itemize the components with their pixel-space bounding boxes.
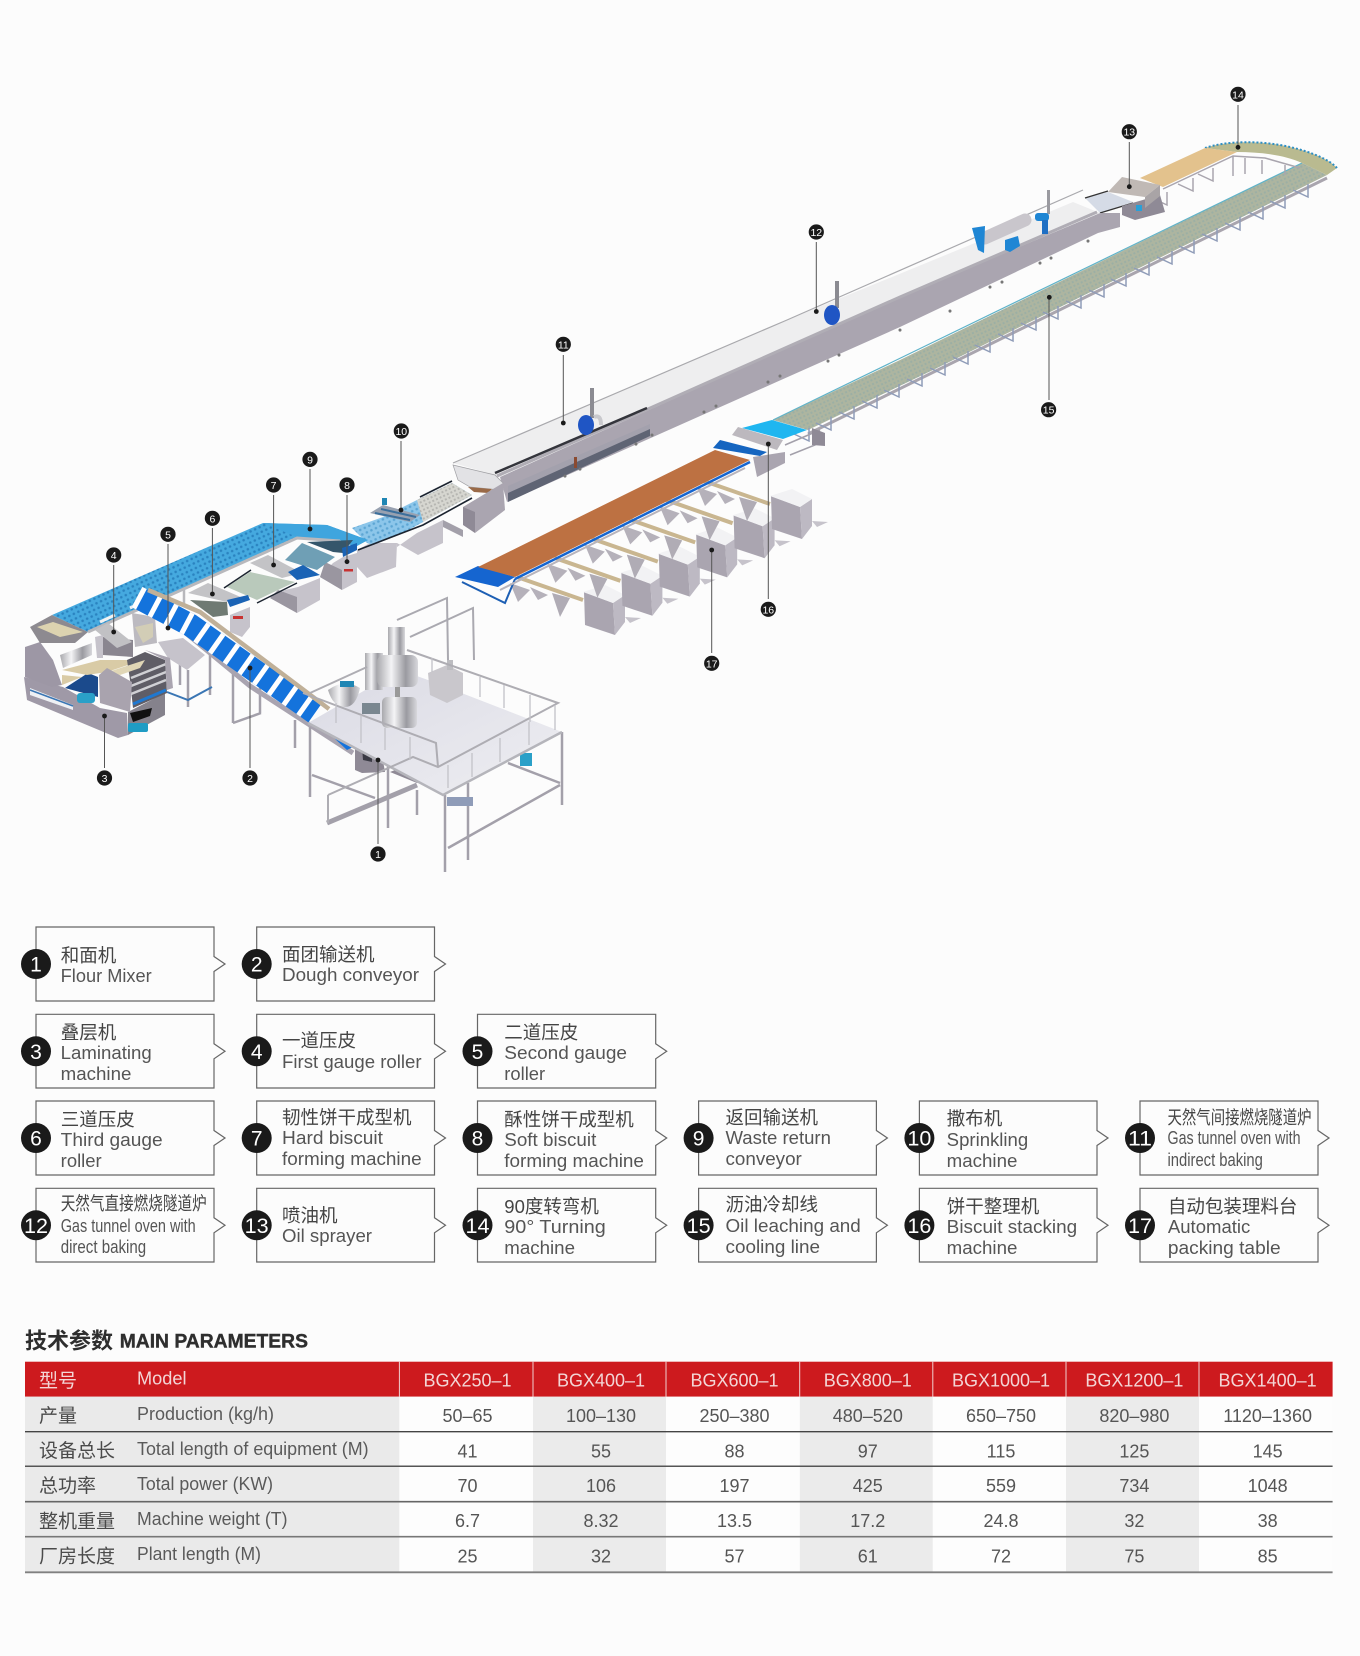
row: machine weight: 13.5	[717, 1511, 752, 1531]
machine 7: hard biscuit forming machine	[224, 555, 320, 613]
row: total length: 88	[724, 1442, 745, 1462]
table header row: BGX1400–1	[1219, 1370, 1317, 1390]
callout markers on illustration	[97, 87, 1246, 862]
far end burner assembly	[972, 190, 1050, 253]
row: machine weight: Machine weight (T)	[137, 1509, 288, 1529]
machine 17: automatic packing table	[455, 450, 828, 635]
row: total power: 197	[719, 1476, 750, 1496]
legend 10: Sprinkling	[947, 1130, 1028, 1150]
legend 5: 5	[472, 1041, 483, 1064]
legend 2	[242, 927, 446, 1001]
row: total length: 55	[591, 1442, 611, 1462]
legend 3: machine	[61, 1064, 131, 1084]
legend 3: Laminating	[61, 1043, 152, 1063]
row: production: 产量	[39, 1405, 77, 1427]
marker 4: 4	[111, 550, 117, 562]
machine 13: oil sprayer	[1085, 177, 1165, 220]
legend 2: Dough conveyor	[282, 965, 419, 985]
legend 7: 7	[251, 1128, 263, 1150]
marker 1	[370, 758, 386, 862]
row: production: 820–980	[1099, 1406, 1169, 1426]
machine 15: oil leaching and cooling line	[773, 163, 1327, 441]
machine 9: waste return conveyor	[52, 523, 368, 632]
legend 7	[242, 1101, 446, 1175]
legend 10: machine	[947, 1151, 1017, 1171]
marker 12: 12	[810, 227, 822, 239]
row: machine weight: 整机重量	[39, 1510, 115, 1532]
table header row: BGX600–1	[690, 1370, 779, 1390]
legend 15: 沥油冷却线	[726, 1194, 818, 1215]
burner set on machine 11	[578, 388, 601, 435]
marker 9	[302, 452, 318, 531]
row: plant length: 25	[457, 1546, 478, 1566]
row: production: Production (kg/h)	[137, 1404, 274, 1424]
row: plant length: 75	[1124, 1546, 1144, 1566]
row: production: 650–750	[966, 1406, 1036, 1426]
legend 7: Hard biscuit	[282, 1128, 383, 1148]
machine 2: dough conveyor	[137, 590, 353, 753]
legend 15	[684, 1188, 887, 1262]
marker 11	[556, 337, 571, 425]
legend 8: Soft biscuit	[504, 1130, 596, 1150]
legend 12: 天然气直接燃烧隧道炉	[61, 1193, 207, 1214]
row: machine weight	[39, 1509, 1278, 1532]
legend 16: 16	[907, 1215, 931, 1238]
marker 5: 5	[165, 529, 171, 541]
legend 15: Oil leaching and	[726, 1216, 861, 1236]
legend 6: 三道压皮	[61, 1109, 135, 1130]
marker 2	[242, 666, 258, 786]
row: total power: 425	[853, 1476, 883, 1496]
marker 10: 10	[395, 426, 407, 438]
marker 15	[1041, 295, 1056, 417]
legend 3: 3	[30, 1041, 42, 1064]
legend 9: conveyor	[726, 1149, 802, 1169]
legend 12: 12	[24, 1215, 48, 1238]
legend of machines	[21, 927, 1329, 1262]
table header row: 型号	[39, 1370, 77, 1392]
row: total power	[39, 1474, 1288, 1497]
legend 4: 一道压皮	[282, 1030, 356, 1051]
legend 8: forming machine	[504, 1151, 644, 1171]
legend 11: 天然气间接燃烧隧道炉	[1168, 1107, 1312, 1128]
row: machine weight: 17.2	[850, 1511, 885, 1531]
marker 8	[339, 477, 355, 564]
legend 14: 14	[466, 1215, 490, 1238]
legend 9	[684, 1101, 887, 1175]
legend 14: 90度转弯机	[504, 1196, 599, 1217]
machine 6: third gauge roller	[188, 583, 250, 637]
marker 12	[809, 224, 824, 314]
row: machine weight: 24.8	[983, 1511, 1019, 1531]
legend 17: 自动包装理料台	[1168, 1196, 1297, 1217]
row: total length: 97	[858, 1442, 878, 1462]
legend 4	[242, 1014, 446, 1088]
row: total length: 125	[1119, 1442, 1149, 1462]
table header row: BGX1200–1	[1085, 1370, 1183, 1390]
legend 15: 15	[687, 1215, 711, 1238]
burner set on machine 12	[824, 281, 840, 325]
table header row: BGX1000–1	[952, 1370, 1050, 1390]
marker 11: 11	[558, 339, 569, 351]
legend 11: Gas tunnel oven with	[1168, 1128, 1300, 1148]
legend 17: Automatic	[1168, 1217, 1250, 1237]
row: plant length: 72	[991, 1546, 1011, 1566]
marker 17	[704, 548, 719, 671]
marker 17: 17	[706, 658, 718, 670]
marker 8: 8	[344, 480, 350, 492]
machine 16: biscuit stacking machine	[713, 420, 825, 477]
legend 16	[904, 1188, 1108, 1262]
legend 1	[21, 927, 225, 1001]
legend 16: machine	[947, 1238, 1017, 1258]
legend 16: Biscuit stacking	[947, 1217, 1077, 1237]
legend 10	[904, 1101, 1108, 1175]
marker 15: 15	[1043, 405, 1055, 417]
table header row: BGX250–1	[423, 1370, 512, 1390]
row: plant length: 32	[591, 1546, 611, 1566]
legend 8	[462, 1101, 667, 1175]
row: machine weight: 8.32	[583, 1511, 619, 1531]
production line illustration	[24, 142, 1337, 872]
machine 1: flour mixer platform	[303, 598, 562, 872]
legend 12: Gas tunnel oven with	[61, 1216, 196, 1236]
legend 11: 11	[1128, 1128, 1152, 1150]
table header row: BGX400–1	[557, 1370, 645, 1390]
table header row	[25, 1362, 1333, 1397]
legend 3	[21, 1014, 225, 1088]
legend 12	[21, 1188, 225, 1262]
legend 6: 6	[30, 1128, 42, 1150]
legend 4: First gauge roller	[282, 1052, 422, 1072]
legend 7: 韧性饼干成型机	[282, 1107, 412, 1128]
legend 13: 喷油机	[282, 1205, 338, 1226]
legend 2: 2	[251, 954, 263, 976]
legend 15: cooling line	[726, 1237, 820, 1257]
legend 1: 和面机	[61, 945, 117, 966]
row: production: 250–380	[699, 1406, 770, 1426]
legend 14: machine	[504, 1238, 575, 1258]
marker 16	[761, 442, 776, 617]
legend 13	[242, 1188, 446, 1262]
row: production	[39, 1404, 1312, 1427]
table heading: MAIN PARAMETERS	[120, 1331, 308, 1353]
legend 14: 90° Turning	[504, 1217, 606, 1237]
row: total power: 734	[1119, 1476, 1149, 1496]
row: total power: 1048	[1248, 1476, 1288, 1496]
legend 5: Second gauge	[504, 1043, 627, 1063]
table heading: 技术参数	[25, 1328, 113, 1354]
legend 5: 二道压皮	[504, 1022, 578, 1043]
legend 17: 17	[1128, 1215, 1152, 1238]
marker 6: 6	[209, 513, 215, 525]
marker 1: 1	[375, 849, 381, 861]
row: plant length: 厂房长度	[39, 1546, 115, 1568]
marker 9: 9	[307, 454, 313, 466]
legend 4: 4	[251, 1041, 263, 1064]
legend 8: 酥性饼干成型机	[504, 1109, 634, 1130]
legend 7: forming machine	[282, 1149, 422, 1169]
legend 3: 叠层机	[61, 1022, 117, 1043]
row: machine weight: 6.7	[455, 1511, 480, 1531]
legend 8: 8	[472, 1128, 483, 1150]
row: total length	[39, 1439, 1283, 1462]
row: production: 1120–1360	[1223, 1406, 1312, 1426]
machine 3: laminating machine	[24, 615, 173, 738]
legend 13: Oil sprayer	[282, 1226, 372, 1246]
row: production: 100–130	[566, 1406, 636, 1426]
marker 5	[160, 527, 176, 630]
row: total length: Total length of equipment (M)	[137, 1439, 369, 1459]
row: total power: 70	[457, 1476, 478, 1496]
legend 5: roller	[504, 1064, 545, 1084]
marker 6	[205, 511, 220, 596]
legend 5	[462, 1014, 667, 1088]
row: total length: 设备总长	[39, 1440, 115, 1462]
row: production: 480–520	[833, 1406, 903, 1426]
row: total length: 115	[987, 1442, 1015, 1462]
legend 11	[1125, 1101, 1329, 1175]
row: total power: 总功率	[39, 1475, 96, 1497]
legend 6	[21, 1101, 225, 1175]
legend 13: 13	[245, 1215, 269, 1238]
row: plant length: 57	[724, 1546, 745, 1566]
marker 14	[1230, 87, 1246, 150]
marker 13: 13	[1123, 127, 1135, 139]
row: plant length: 61	[858, 1546, 878, 1566]
row: plant length: 85	[1258, 1546, 1278, 1566]
legend 6: Third gauge	[61, 1130, 163, 1150]
marker 4	[106, 547, 121, 634]
table heading	[25, 1328, 308, 1354]
row: total power: Total power (KW)	[137, 1474, 273, 1494]
legend 17: packing table	[1168, 1238, 1281, 1258]
marker 13	[1122, 124, 1137, 189]
table header row: Model	[137, 1368, 186, 1388]
marker 16: 16	[762, 604, 774, 616]
row: machine weight: 38	[1258, 1511, 1278, 1531]
legend 14	[462, 1188, 667, 1262]
marker 7	[266, 477, 281, 567]
marker 3: 3	[102, 773, 108, 785]
legend 1: 1	[30, 954, 42, 976]
row: total length: 41	[457, 1442, 478, 1462]
row: total length: 145	[1253, 1442, 1283, 1462]
row: total power: 559	[986, 1476, 1016, 1496]
machine 11 and 12: gas tunnel oven body	[453, 190, 1120, 533]
legend 10: 10	[907, 1128, 931, 1150]
machine 10: sprinkling machine and conveyor into oven	[352, 481, 472, 578]
legend 12: direct baking	[61, 1237, 146, 1257]
machines 4 and 5: gauge rollers and table	[95, 613, 212, 707]
marker 10	[394, 423, 409, 512]
marker 14: 14	[1232, 89, 1244, 101]
row: plant length: Plant length (M)	[137, 1544, 261, 1564]
legend 16: 饼干整理机	[947, 1196, 1040, 1217]
row: machine weight: 32	[1124, 1511, 1144, 1531]
row: production: 50–65	[442, 1406, 493, 1426]
table header row: BGX800–1	[824, 1370, 912, 1390]
legend 10: 撒布机	[947, 1108, 1003, 1129]
table shaded columns	[25, 1397, 1333, 1572]
row: total power: 106	[586, 1476, 616, 1496]
legend 9: 9	[693, 1128, 704, 1150]
machine 8: soft biscuit forming machine	[285, 540, 357, 590]
legend 11: indirect baking	[1168, 1150, 1263, 1170]
marker 3	[97, 714, 112, 786]
legend 9: Waste return	[726, 1128, 831, 1148]
legend 6: roller	[61, 1151, 102, 1171]
parameters table	[25, 1362, 1333, 1572]
legend 1: Flour Mixer	[61, 966, 152, 986]
row: plant length	[39, 1544, 1278, 1568]
marker 2: 2	[247, 773, 253, 785]
marker 7: 7	[271, 480, 277, 492]
legend 9: 返回输送机	[726, 1107, 819, 1128]
legend 17	[1125, 1188, 1329, 1262]
machine 14: 90 degree turning machine	[1140, 142, 1337, 205]
legend 2: 面团输送机	[282, 944, 375, 965]
